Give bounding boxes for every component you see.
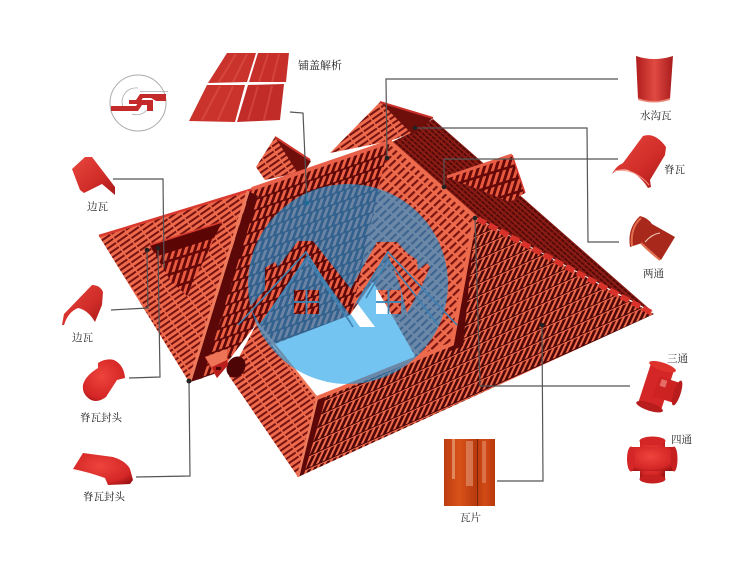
label: ridge end cap 2: 脊瓦封头: [83, 490, 125, 503]
label: roof covering analysis: 铺盖解析: [298, 58, 342, 72]
icon: three-way tile: [635, 359, 688, 418]
label: edge tile 1: 边瓦: [87, 200, 108, 213]
lower left roof band: [229, 323, 317, 477]
courtyard opening: [272, 282, 415, 398]
left wing roof face: [99, 191, 248, 382]
icon: edge tile 2: [62, 285, 103, 325]
logo disc: [248, 184, 448, 384]
label: edge tile 2: 边瓦: [72, 331, 93, 344]
icon: two-way tile: [629, 216, 675, 260]
label: three-way tile: 三通: [667, 353, 688, 365]
label: ridge tile: 脊瓦: [664, 163, 685, 176]
leader dots: [145, 126, 544, 383]
icon: interlock section circle: [110, 75, 168, 131]
top dormer: [330, 102, 433, 153]
shadows and ridges: [99, 141, 652, 477]
icon: four-way tile: [627, 436, 678, 484]
label: ridge end cap 1: 脊瓦封头: [80, 411, 122, 424]
logo: blue circle with houses: [238, 175, 460, 395]
label: gutter tile: 水沟瓦: [640, 109, 672, 122]
leader lines: [111, 79, 630, 481]
central roof face: [190, 142, 392, 382]
icon: gutter tile: [636, 56, 673, 102]
icon: ridge end cap 1: [83, 359, 125, 401]
right dormer: [447, 155, 525, 202]
left wing dormer: [150, 222, 222, 296]
icon: ridge end cap 2: [73, 453, 133, 485]
label: two-way tile: 两通: [643, 268, 664, 280]
icon: edge tile 1: [72, 157, 115, 195]
main front roof face: [298, 218, 654, 477]
back dark roof slope: [392, 119, 653, 312]
label: flat tile: 瓦片: [460, 511, 481, 524]
label: four-way tile: 四通: [671, 434, 692, 446]
logo house lines: [238, 252, 457, 327]
panel: roof covering sample: [189, 53, 289, 122]
icon: ridge tile: [612, 135, 666, 188]
roof illustration: [99, 102, 654, 477]
small left dormer: [256, 137, 311, 180]
right hip roof face: [352, 142, 475, 358]
icon: flat tile: [444, 439, 495, 506]
chimney: [205, 349, 249, 381]
